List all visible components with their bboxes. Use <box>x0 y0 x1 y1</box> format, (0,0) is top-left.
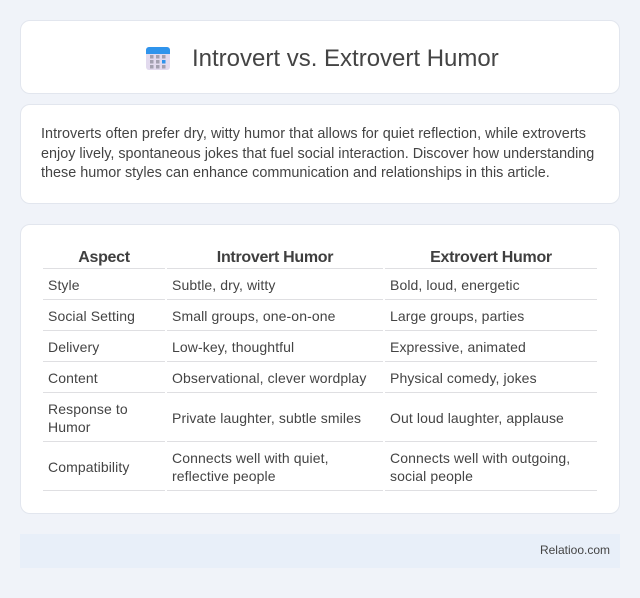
row: Compatibility: Connects well with outgoing, <box>390 450 570 466</box>
header: Introvert Humor: Introvert Humor <box>217 249 333 266</box>
intro text <box>41 126 594 181</box>
title card <box>20 20 620 94</box>
panel: intro <box>20 104 620 204</box>
row: Style: Bold, loud, energetic <box>390 277 520 293</box>
row: Response to Humor: Response to <box>48 401 128 417</box>
intro text: these humor styles can enhance communication and relationships in this article. <box>41 165 550 181</box>
table header <box>43 249 597 269</box>
intro text: enjoy lively, spontaneous jokes that fuel social interaction. Discover how understanding <box>41 146 594 162</box>
row: Social Setting <box>43 308 597 331</box>
row: Compatibility: Compatibility <box>48 459 129 475</box>
panel: comparison table <box>20 224 620 514</box>
row: Compatibility: reflective people <box>172 468 276 484</box>
row: Social Setting: Social Setting <box>48 308 135 324</box>
row: Delivery: Low-key, thoughtful <box>172 339 294 355</box>
row: Style: Style <box>48 277 80 293</box>
row: Style: Subtle, dry, witty <box>172 277 275 293</box>
header: Extrovert Humor: Extrovert Humor <box>430 249 552 266</box>
row: Content: Observational, clever wordplay <box>172 370 366 386</box>
row: Compatibility <box>43 450 597 491</box>
row: Social Setting: Small groups, one-on-one <box>172 308 336 324</box>
row: Response to Humor: Private laughter, subtle smiles <box>172 410 361 426</box>
row: Content: Content <box>48 370 98 386</box>
row: Delivery: Delivery <box>48 339 99 355</box>
row: Compatibility: Connects well with quiet, <box>172 450 329 466</box>
row: Content <box>43 370 597 393</box>
row: Social Setting: Large groups, parties <box>390 308 524 324</box>
row: Response to Humor <box>43 401 597 442</box>
row: Content: Physical comedy, jokes <box>390 370 537 386</box>
intro text: Introverts often prefer dry, witty humor that allows for quiet reflection, while extroverts <box>41 126 586 142</box>
row: Style <box>43 277 597 300</box>
header: Aspect: Aspect <box>78 249 130 266</box>
row: Response to Humor: Humor <box>48 419 91 435</box>
footer text: Relatioo.com <box>540 543 610 557</box>
title: Introvert vs. Extrovert Humor <box>192 45 499 72</box>
row: Compatibility: social people <box>390 468 473 484</box>
row: Response to Humor: Out loud laughter, applause <box>390 410 564 426</box>
row: Delivery <box>43 339 597 362</box>
row: Delivery: Expressive, animated <box>390 339 526 355</box>
footer <box>20 534 620 568</box>
icon: calendar <box>146 47 170 70</box>
